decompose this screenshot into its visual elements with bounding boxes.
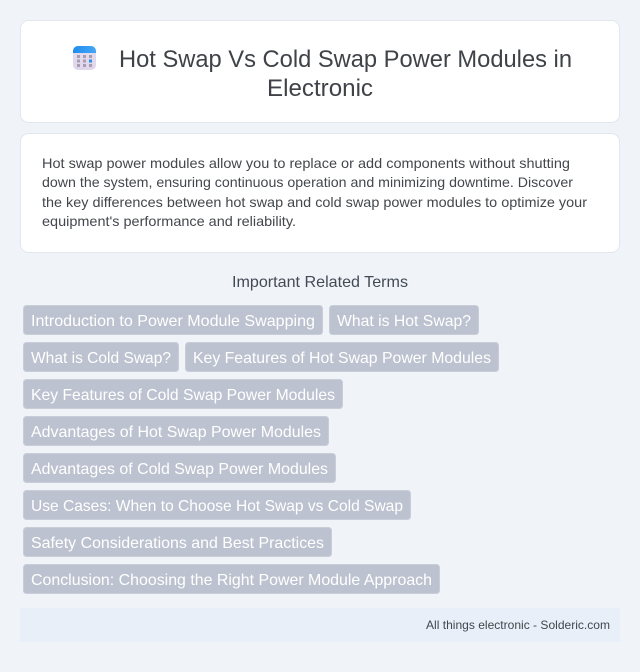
heading: related terms: Important Related Terms xyxy=(232,274,408,291)
tag: introduction xyxy=(24,306,322,334)
icon: calendar xyxy=(73,46,96,70)
tag: conclusion: Conclusion: Choosing the Right Power Module Approach xyxy=(31,572,432,589)
tag: hot swap advantages: Advantages of Hot Swap Power Modules xyxy=(31,424,321,441)
tag: hot swap advantages xyxy=(24,416,328,446)
tag: conclusion xyxy=(24,564,440,594)
panel: title card xyxy=(20,20,620,122)
text block: description: down the system, ensuring continuous operation and minimizing downtime. Discover xyxy=(42,174,573,190)
tag: what is cold swap: What is Cold Swap? xyxy=(31,350,171,367)
tag: introduction: Introduction to Power Module Swapping xyxy=(31,313,315,330)
tag: hot swap features: Key Features of Hot Swap Power Modules xyxy=(193,350,491,367)
title: Hot Swap Vs Cold Swap Power Modules in xyxy=(119,46,572,73)
text block: description: Hot swap power modules allow you to replace or add components without shutting xyxy=(42,155,570,171)
text block: description: equipment's performance and reliability. xyxy=(42,213,296,229)
tag: cold swap advantages: Advantages of Cold Swap Power Modules xyxy=(31,461,328,478)
tag: safety: Safety Considerations and Best Practices xyxy=(31,535,324,552)
footer xyxy=(20,608,620,642)
footer text: All things electronic - Solderic.com xyxy=(426,618,610,632)
tag: use cases: Use Cases: When to Choose Hot Swap vs Cold Swap xyxy=(31,498,403,515)
panel: description xyxy=(20,134,620,252)
tag: what is hot swap xyxy=(330,306,478,334)
tag: cold swap features xyxy=(24,380,342,408)
tag: what is cold swap xyxy=(24,342,178,372)
title: Electronic xyxy=(267,75,373,102)
tag list xyxy=(24,306,498,594)
tag: use cases xyxy=(24,490,410,520)
text block: description: the key differences between hot swap and cold swap power modules to optimize your xyxy=(42,194,587,210)
tag: safety xyxy=(24,528,332,556)
tag: what is hot swap: What is Hot Swap? xyxy=(337,313,471,330)
tag: cold swap features: Key Features of Cold Swap Power Modules xyxy=(31,387,335,404)
tag: hot swap features xyxy=(186,342,498,372)
tag: cold swap advantages xyxy=(24,454,336,482)
